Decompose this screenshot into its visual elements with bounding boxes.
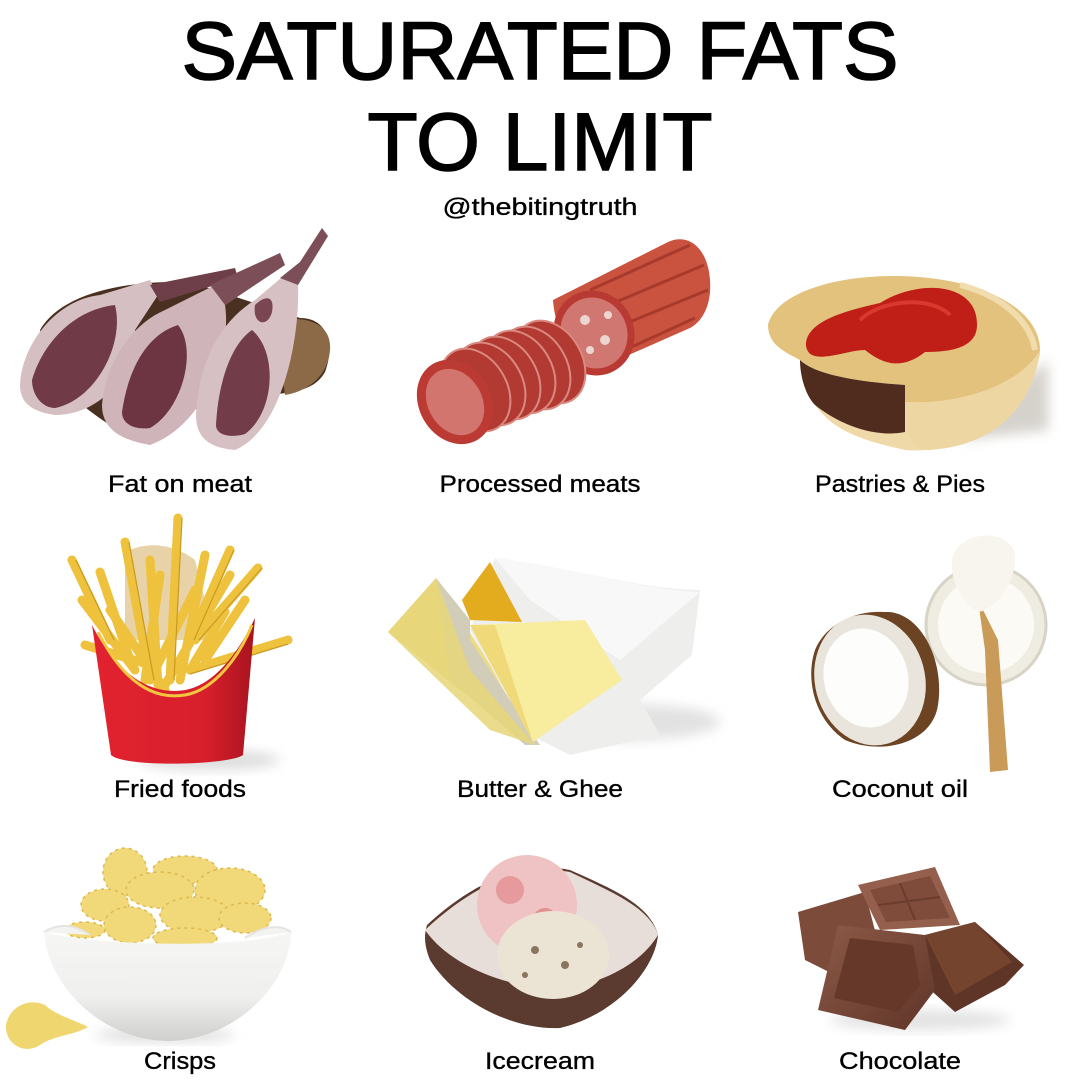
icon: icecream bowl [425,855,658,1028]
panel: processed meats [402,239,710,498]
title: SATURATED FATS [182,6,898,97]
handle: @thebitingtruth [442,194,638,221]
panel: fat on meat [20,228,330,498]
label: Icecream [485,1048,595,1075]
label: Chocolate [839,1048,961,1075]
panel: icecream [425,855,658,1075]
icon: coconut and jar [800,536,1046,772]
icon: loose crisp [6,1002,88,1049]
icon: fries [72,518,288,770]
icon: meat pie [768,276,1048,450]
icon: salami [402,239,710,458]
title: TO LIMIT [368,97,712,188]
label: Coconut oil [832,776,968,803]
panel: pastries and pies [768,276,1048,498]
label: Crisps [144,1048,216,1075]
icon: lamb chops [20,228,330,450]
panel: fried foods [72,518,288,803]
panel: crisps [6,848,291,1075]
icon: chocolate pieces [798,867,1024,1030]
icon: butter [388,558,720,755]
label: Fried foods [114,776,246,803]
title [182,6,898,188]
label: Processed meats [440,471,640,498]
panel: butter and ghee [388,558,720,803]
panel: coconut oil [800,536,1046,803]
label: Pastries & Pies [815,471,985,498]
label: Fat on meat [108,471,252,498]
icon: crisps bowl [6,848,291,1049]
panel: chocolate [798,867,1024,1075]
label: Butter & Ghee [457,776,623,803]
